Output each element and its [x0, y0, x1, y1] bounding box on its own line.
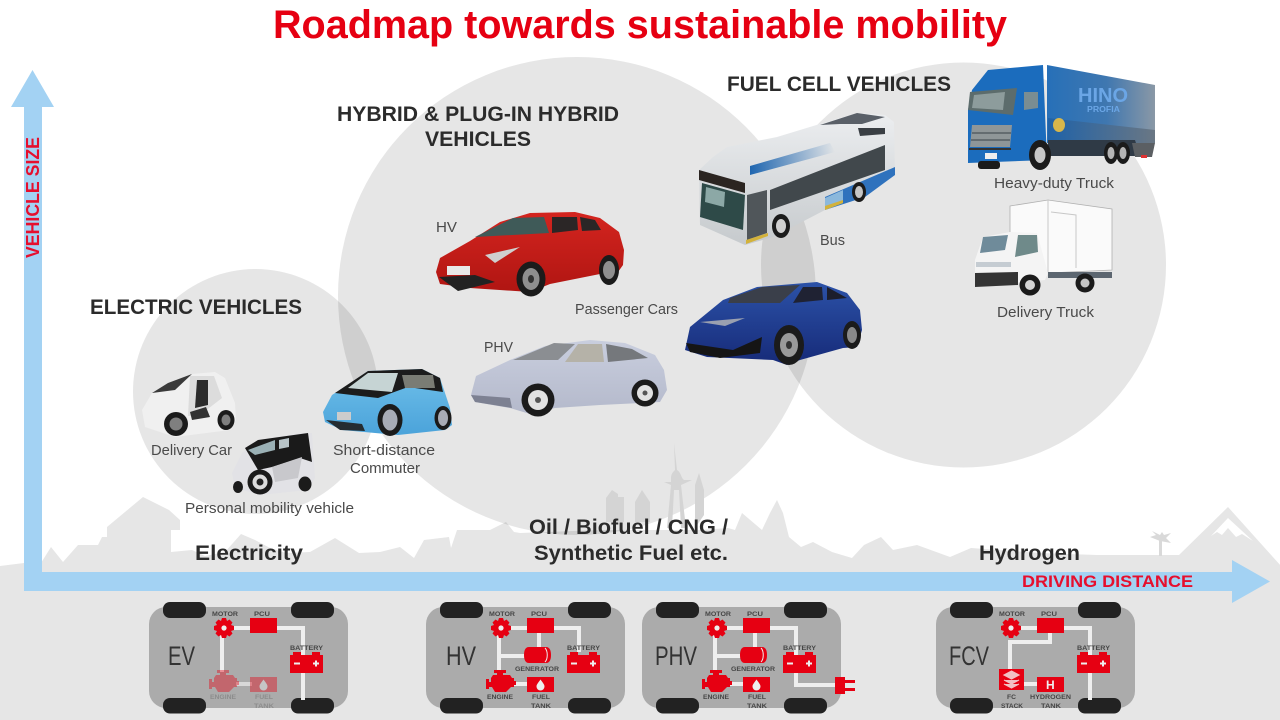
heading: hybrid and plug-in hybrid vehicles: [337, 103, 619, 151]
powertrain diagram: FCV: BATTERY: [1077, 645, 1111, 652]
icon: hydrogen tank: [1037, 677, 1064, 692]
powertrain diagram: FCV: FC: [1007, 694, 1016, 701]
powertrain diagram: EV: EV: [168, 641, 195, 671]
powertrain diagram: HV: PCU: [531, 611, 547, 618]
energy label: hydrogen: Hydrogen: [979, 542, 1080, 565]
powertrain diagram: FCV: FCV: [949, 641, 989, 671]
energy label: oil, biofuel, CNG, synthetic fuel: Synthetic Fuel etc.: [534, 542, 728, 565]
powertrain diagram: HV: MOTOR: [489, 611, 515, 618]
powertrain diagram: EV: ENGINE: [210, 694, 237, 701]
powertrain diagram: FCV: STACK: [1001, 703, 1023, 710]
powertrain diagram: HV: GENERATOR: [515, 666, 559, 673]
vehicle: hybrid car, red: [436, 212, 624, 296]
powertrain diagram: PHV: MOTOR: [705, 611, 731, 618]
vehicle: heavy-duty truck: PROFIA: [1087, 105, 1120, 114]
axis label: driving distance: DRIVING DISTANCE: [1022, 572, 1193, 591]
powertrain diagram: HV: BATTERY: [567, 645, 601, 652]
label: personal mobility vehicle: Personal mobility vehicle: [185, 500, 354, 517]
vehicle: plug-in hybrid car, silver: [471, 340, 667, 416]
label: passenger cars: Passenger Cars: [575, 301, 678, 318]
heading: hybrid and plug-in hybrid vehicles: HYBRID & PLUG-IN HYBRID: [337, 103, 619, 126]
powertrain diagram: HV: FUEL: [532, 694, 550, 701]
powertrain diagram: EV: TANK: [254, 703, 274, 710]
icon: FC stack: [999, 669, 1024, 690]
bubble: hybrid and plug-in hybrid vehicles: [338, 57, 816, 535]
vehicle: fuel cell passenger car, blue: [685, 282, 862, 365]
title: Roadmap towards sustainable mobility: [273, 3, 1008, 47]
powertrain diagram: PHV: TANK: [747, 703, 767, 710]
label: heavy-duty truck: Heavy-duty Truck: [994, 175, 1114, 192]
powertrain diagram: EV: MOTOR: [212, 611, 238, 618]
heading: fuel cell vehicles: FUEL CELL VEHICLES: [727, 73, 951, 96]
powertrain diagram: PHV: BATTERY: [783, 645, 817, 652]
powertrain diagram: HV: TANK: [531, 703, 551, 710]
powertrain diagram: PHV: ENGINE: [703, 694, 730, 701]
powertrain diagram: FCV: TANK: [1041, 703, 1061, 710]
palm tree: [1150, 531, 1171, 556]
powertrain diagram: HV: HV: [446, 641, 476, 671]
powertrain diagram: EV: FUEL: [255, 694, 273, 701]
powertrain diagram: FCV: PCU: [1041, 611, 1057, 618]
icon: plug: [835, 677, 855, 694]
mountain snow cap: [1211, 518, 1253, 541]
bubble: electric vehicles: [133, 269, 378, 514]
label: short-distance commuter: Commuter: [350, 460, 420, 477]
label: delivery car: Delivery Car: [151, 442, 232, 459]
powertrain diagram: PHV: FUEL: [748, 694, 766, 701]
heading: electric vehicles: ELECTRIC VEHICLES: [90, 296, 302, 319]
icon: hydrogen tank: H: [1046, 678, 1055, 692]
label: short-distance commuter: Short-distance: [333, 442, 435, 459]
vehicle: personal mobility vehicle: [232, 433, 315, 495]
powertrain diagram: EV: [149, 602, 348, 714]
vehicle: heavy-duty truck: [968, 65, 1155, 170]
energy label: oil, biofuel, CNG, synthetic fuel: Oil / Biofuel / CNG /: [529, 516, 728, 539]
label: bus: Bus: [820, 232, 845, 249]
label: delivery truck: Delivery Truck: [997, 304, 1094, 321]
powertrain diagram: PHV: GENERATOR: [731, 666, 775, 673]
vehicle: heavy-duty truck: HINO: [1078, 85, 1128, 107]
background skyline and ground: [0, 497, 1280, 720]
city tower skyline over hybrid bubble: [606, 443, 704, 528]
powertrain diagram: FCV: [936, 602, 1135, 714]
powertrain diagram: PHV: PCU: [747, 611, 763, 618]
energy label: oil, biofuel, CNG, synthetic fuel: [529, 516, 728, 565]
vehicle: delivery car, white open cab: [142, 372, 236, 437]
vehicle: delivery truck: [975, 200, 1112, 296]
powertrain diagram: EV: BATTERY: [290, 645, 324, 652]
powertrain diagram: PHV: [642, 602, 855, 714]
bubble: fuel cell vehicles: [761, 62, 1166, 468]
axis label: vehicle size: VEHICLE SIZE: [23, 137, 43, 258]
powertrain diagram: EV: PCU: [254, 611, 270, 618]
energy label: electricity: Electricity: [195, 542, 303, 565]
vehicle: fuel cell bus: [699, 113, 895, 245]
label: short-distance commuter: [333, 442, 435, 477]
label: PHV: PHV: [484, 339, 513, 356]
powertrain diagram: HV: [426, 602, 625, 714]
powertrain diagram: HV: ENGINE: [487, 694, 514, 701]
label: HV: HV: [436, 219, 457, 236]
heading: hybrid and plug-in hybrid vehicles: VEHICLES: [425, 128, 531, 151]
powertrain diagram: FCV: MOTOR: [999, 611, 1025, 618]
powertrain diagram: FCV: HYDROGEN: [1030, 694, 1071, 701]
vehicle: short-distance commuter, light blue: [323, 369, 452, 436]
powertrain diagram: PHV: PHV: [655, 641, 697, 671]
axis arrow: vehicle size and driving distance: [11, 70, 1270, 603]
